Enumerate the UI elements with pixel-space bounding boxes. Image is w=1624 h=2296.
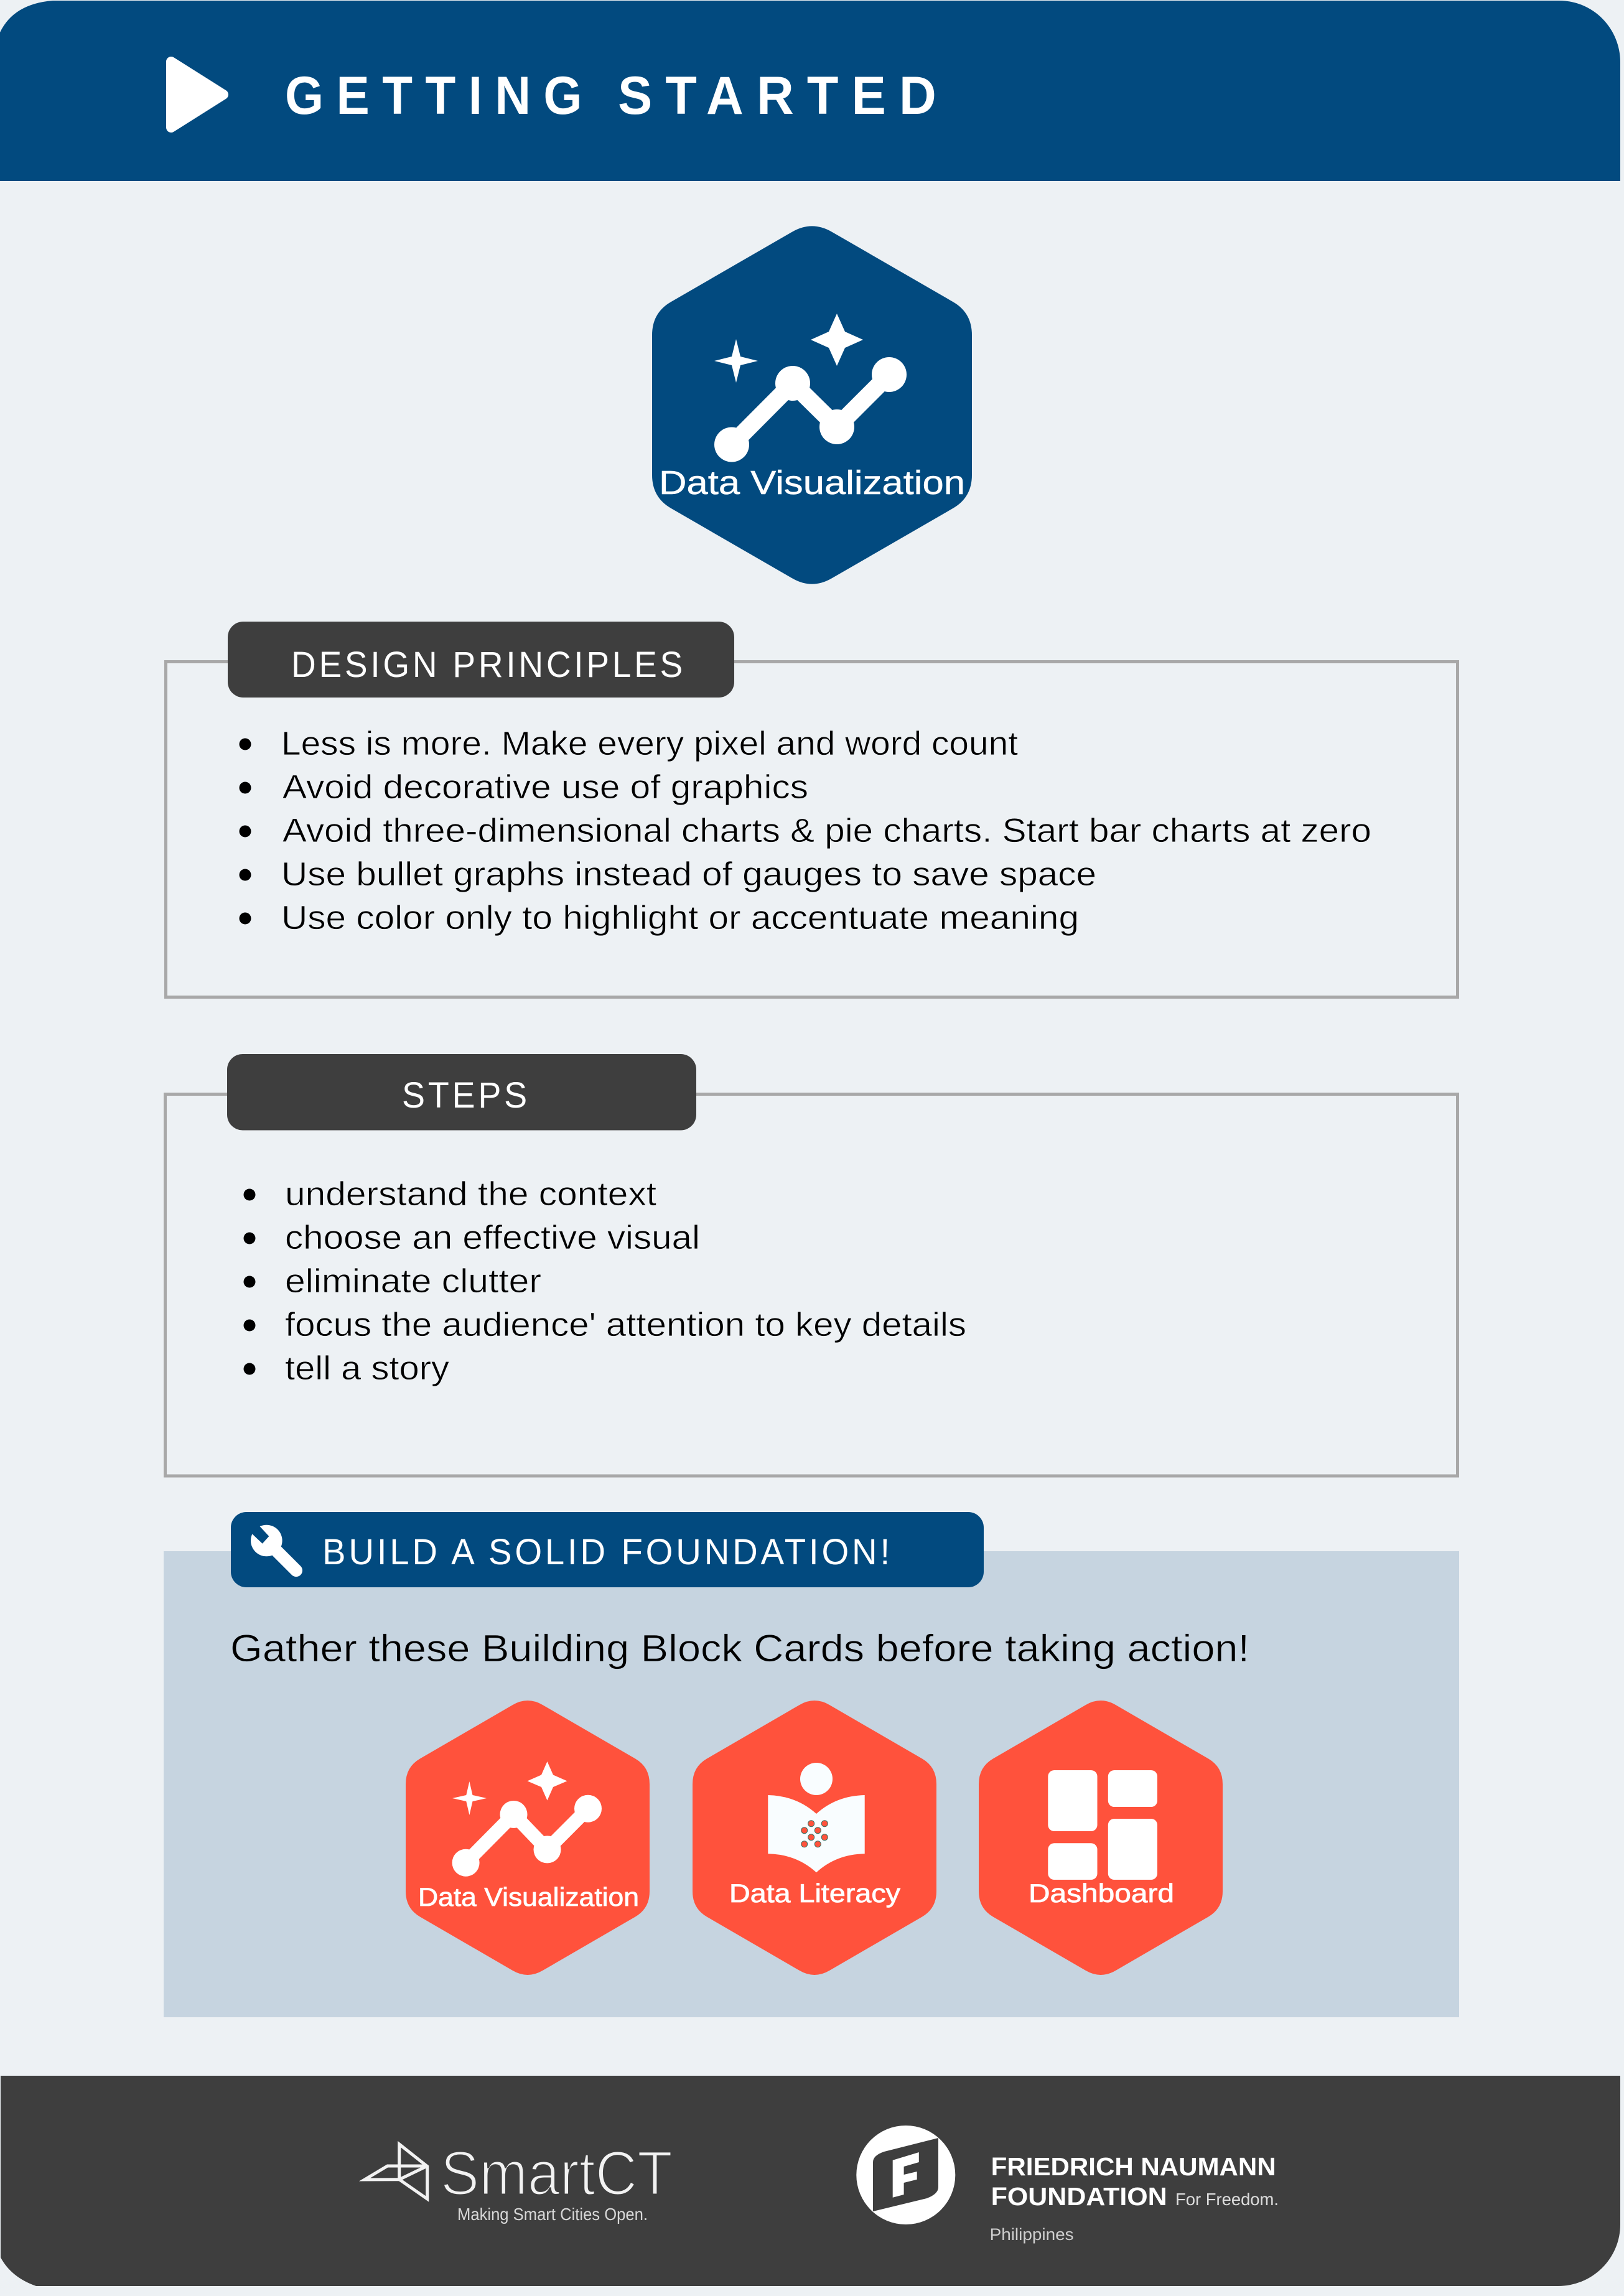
card: data literacy [693, 1701, 936, 1975]
heading tab: steps: STEPS [402, 1075, 530, 1116]
card: dashboard: Dashboard [1029, 1878, 1174, 1908]
footer band [1, 2076, 1620, 2286]
icon: play triangle [171, 62, 223, 128]
heading tab: build a solid foundation: BUILD A SOLID FOUNDATION! [322, 1532, 893, 1572]
icon: line chart with stars [714, 314, 907, 462]
bullet list: steps: tell a story [285, 1350, 449, 1387]
logo: Friedrich Naumann Foundation: FOUNDATION [991, 2182, 1167, 2211]
bullet list: steps: focus the audience' attention to key details [285, 1306, 966, 1343]
icon: FNF roundel [856, 2126, 955, 2224]
icon: wrench [246, 1521, 296, 1570]
bullet list: design principles: Less is more. Make every pixel and word count [281, 725, 1018, 762]
bullet list: design principles: Use bullet graphs instead of gauges to save space [281, 856, 1096, 893]
bullet list: steps [244, 1175, 966, 1387]
header banner [0, 1, 1620, 181]
logo: Friedrich Naumann Foundation: For Freedom. [1175, 2190, 1279, 2209]
icon: open book with reader [768, 1763, 865, 1872]
logo: Friedrich Naumann Foundation: Philippines [990, 2225, 1074, 2244]
bullet list: steps: choose an effective visual [285, 1219, 700, 1256]
panel: build a solid foundation [164, 1512, 1459, 2017]
icon: SmartCT mark [365, 2144, 427, 2199]
logo: Friedrich Naumann Foundation: FRIEDRICH NAUMANN [991, 2152, 1276, 2181]
panel: steps [166, 1054, 1457, 1476]
title: STARTED [618, 66, 950, 126]
bullet list: design principles [239, 725, 1371, 936]
title: GETTING [285, 66, 595, 126]
panel: design principles [166, 622, 1457, 997]
heading tab: design principles [228, 622, 734, 698]
card: data visualization: Data Visualization [418, 1882, 639, 1911]
bullet list: design principles: Avoid three-dimensional charts & pie charts. Start bar charts at zero [282, 812, 1371, 849]
intro sentence: Gather these Building Block Cards before taking action! [230, 1627, 1249, 1669]
badge label: Data Visualization [659, 464, 965, 502]
icon: line chart with stars [452, 1762, 602, 1877]
heading tab: build a solid foundation [231, 1512, 984, 1587]
icon: dashboard tiles [1048, 1770, 1157, 1880]
card: data visualization [406, 1701, 650, 1975]
bullet list: steps: understand the context [285, 1175, 656, 1213]
logo: Friedrich Naumann Foundation [856, 2126, 1279, 2244]
title [285, 66, 950, 126]
bullet list: design principles: Avoid decorative use of graphics [282, 768, 808, 806]
card: data literacy: Data Literacy [729, 1878, 900, 1908]
card: dashboard [979, 1701, 1223, 1975]
heading tab: design principles: DESIGN PRINCIPLES [291, 645, 686, 685]
bullet list: design principles: Use color only to highlight or accentuate meaning [281, 899, 1079, 936]
bullet list: steps: eliminate clutter [285, 1262, 541, 1300]
heading tab: steps [227, 1054, 696, 1130]
logo: SmartCT: SmartCT [441, 2139, 673, 2208]
logo: SmartCT [365, 2139, 673, 2224]
badge: data visualization [652, 226, 972, 584]
logo: SmartCT: Making Smart Cities Open. [457, 2205, 648, 2224]
